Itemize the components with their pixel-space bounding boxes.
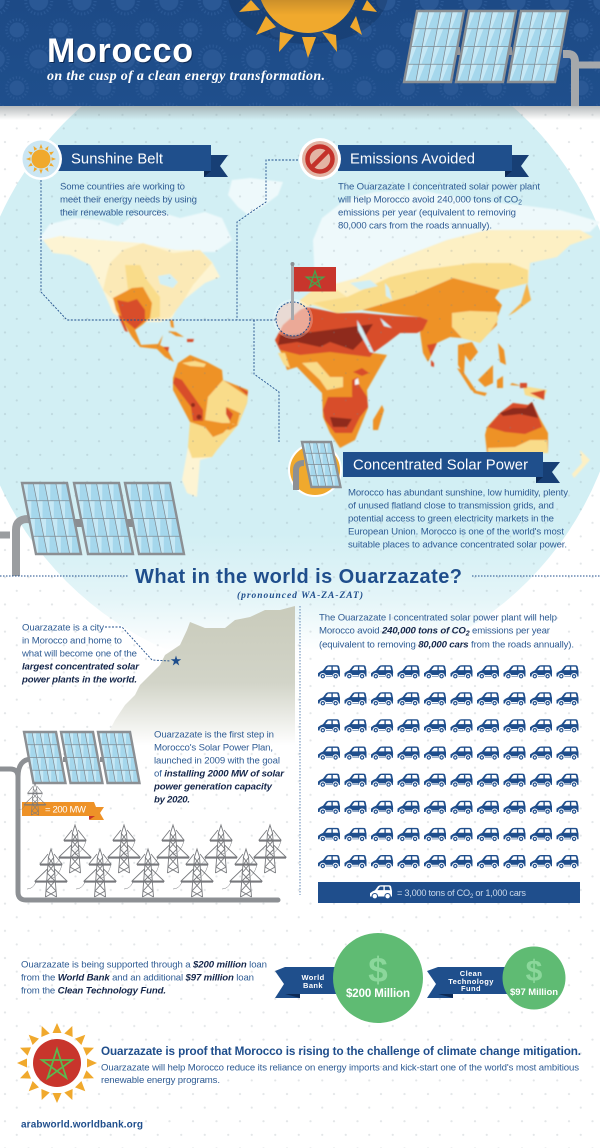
transmission towers [27, 825, 286, 897]
text: concentrated solar power body: potential access to green electricity markets in the [348, 514, 554, 524]
text: closing statement [101, 1045, 581, 1086]
text: sunshine belt body: meet their energy needs by using [60, 194, 197, 206]
chart: Clean Technology Fund loan: $ [526, 955, 543, 988]
icon: solar panel in orange circle [288, 442, 342, 497]
chart: World Bank loan: World [301, 973, 325, 982]
text: loans: from the World Bank and an additional $97 million loan [21, 972, 254, 984]
chart: Clean Technology Fund loan: $97 Million [510, 987, 558, 998]
map: Australia [485, 402, 590, 478]
text: solar power plan: power generation capacity [153, 782, 273, 792]
legend ribbon: 200 MW per tower [19, 783, 104, 820]
map: Africa and Middle East [275, 307, 428, 448]
text: solar power plan: launched in 2009 with the goal [154, 756, 280, 766]
chart: World Bank loan: Bank [303, 981, 323, 990]
chart: Clean Technology Fund loan: Clean [460, 969, 482, 978]
banner: emissions avoided: Emissions Avoided [350, 152, 475, 168]
chart: World Bank loan: $ [368, 951, 388, 990]
heading: what in the world is Ouarzazate: What in the world is Ouarzazate? [135, 566, 462, 588]
legend bar: cars: = 3,000 tons of CO [397, 888, 470, 898]
legend bar: cars: 2 [470, 894, 474, 900]
map: white arctic land [38, 178, 600, 290]
text: closing statement: Ouarzazate is proof that Morocco is rising to the challenge of climate change mitigation. [101, 1045, 581, 1058]
text: sunshine belt body [60, 182, 197, 218]
panel: sunshine belt [20, 138, 228, 218]
subtitle: on the cusp of a clean energy transformation. [47, 69, 325, 84]
flag of Morocco [290, 262, 336, 320]
header banner [0, 0, 600, 106]
text: solar power plan: by 2020. [154, 794, 190, 806]
text: plant emissions: Morocco avoid 240,000 tons of CO [319, 626, 466, 636]
text: city description: power plants in the world. [21, 674, 137, 686]
title: Morocco [47, 32, 193, 70]
text: city description: Ouarzazate is a city [22, 622, 104, 634]
map: Morocco outline [100, 606, 295, 745]
shadow under header [0, 106, 600, 120]
text: solar power plan: Ouarzazate is the first step in [154, 730, 274, 740]
text: emissions avoided body: 2 [518, 200, 522, 206]
text: emissions avoided body: 80,000 cars from the roads annually). [338, 220, 492, 232]
text: city description: in Morocco and home to [22, 636, 122, 646]
chart: Clean Technology Fund loan: Fund [461, 984, 481, 993]
text: plant emissions: 2 [465, 630, 470, 638]
legend ribbon: 200 MW per tower: = 200 MW [45, 804, 86, 816]
chart: Clean Technology Fund loan: Technology [448, 977, 494, 986]
text: emissions avoided body: The Ouarzazate I concentrated solar power plant [338, 182, 540, 192]
text: sunshine belt body: their renewable resources. [60, 208, 169, 218]
text: emissions avoided body: will help Morocco avoid 240,000 tons of CO [338, 194, 518, 206]
map: Eurasia [300, 230, 593, 375]
section divider [299, 606, 301, 895]
icon: Moroccan flag sun [17, 1023, 97, 1103]
chart: World Bank loan: $200 Million [346, 988, 410, 1000]
legend bar: cars: or 1,000 cars [473, 888, 526, 898]
banner: concentrated solar power [343, 452, 560, 483]
text: loans: Ouarzazate is being supported through a $200 million loan [21, 960, 267, 970]
text: solar power plan: of installing 2000 MW of solar [154, 768, 285, 780]
text: solar power plan: Morocco's Solar Power Plan, [154, 742, 273, 754]
text: emissions avoided body: emissions per year (equivalent to removing [338, 208, 516, 218]
banner: emissions avoided [338, 145, 529, 177]
text: closing statement: Ouarzazate will help Morocco reduce its reliance on energy imports and kick-start one of the world's most ambitious [101, 1062, 579, 1074]
panel: emissions avoided [299, 138, 540, 232]
dotted connector: concentrated solar power to Morocco [254, 320, 279, 442]
text: plant emissions: (equivalent to removing 80,000 cars from the roads annually). [319, 640, 574, 650]
icon: prohibition sign [299, 138, 341, 180]
map: South America [173, 355, 248, 497]
legend bar: cars [318, 882, 580, 903]
source link: arabworld.worldbank.org [21, 1120, 143, 1130]
banner: concentrated solar power: Concentrated Solar Power [353, 458, 528, 474]
text: closing statement: renewable energy programs. [101, 1075, 220, 1086]
banner: sunshine belt: Sunshine Belt [71, 152, 163, 168]
chart: Clean Technology Fund loan [427, 946, 566, 1010]
text: concentrated solar power body [348, 488, 568, 550]
text: city description: largest concentrated solar [22, 662, 140, 672]
banner: sunshine belt [58, 145, 228, 177]
left large solar panels [0, 483, 184, 576]
highlight bubble over Morocco [273, 299, 313, 339]
text: city description [21, 622, 140, 686]
heading: what in the world is Ouarzazate: (pronounced WA-ZA-ZAT) [237, 590, 363, 601]
header pipe [452, 47, 600, 106]
map: North America [43, 236, 220, 362]
text: plant emissions: emissions per year [469, 626, 551, 636]
pictogram: cars grid [318, 665, 578, 869]
text: loans [21, 960, 267, 996]
text: concentrated solar power body: Morocco has abundant sunshine, low humidity, plenty [348, 488, 568, 498]
icon: sun [20, 138, 62, 180]
text: plant emissions [319, 612, 574, 650]
map: Southeast Asia and Indonesia [457, 343, 547, 400]
text: concentrated solar power body: of unused flatland close to transmission grids, and [348, 500, 554, 512]
text: concentrated solar power body: suitable places to advance concentrated solar power. [348, 540, 567, 550]
Morocco location marker [273, 262, 336, 339]
text: city description: what will become one of the [21, 648, 137, 660]
text: concentrated solar power body: European Union. Morocco is one of the world's most [348, 526, 564, 538]
chart: World Bank loan [275, 933, 423, 1023]
text: sunshine belt body: Some countries are working to [60, 182, 185, 192]
text: emissions avoided body [337, 182, 540, 232]
dotted connector: emissions avoided to Morocco [237, 160, 298, 320]
icon: header solar panels [404, 11, 568, 82]
text: solar power plan [153, 730, 285, 806]
small solar panels and pipeline [0, 732, 278, 900]
globe ocean backdrop [0, 25, 600, 677]
dotted connector: sunshine belt to Morocco [41, 180, 278, 320]
icon: Ouarzazate star with leader line [105, 627, 181, 665]
icon: sun [228, 0, 388, 58]
text: plant emissions: The Ouarzazate I concentrated solar power plant will help [319, 612, 557, 624]
text: loans: from the Clean Technology Fund. [21, 986, 166, 996]
world solar resource map [38, 178, 600, 497]
heading: what in the world is Ouarzazate [0, 566, 600, 601]
panel: concentrated solar power [288, 442, 568, 550]
